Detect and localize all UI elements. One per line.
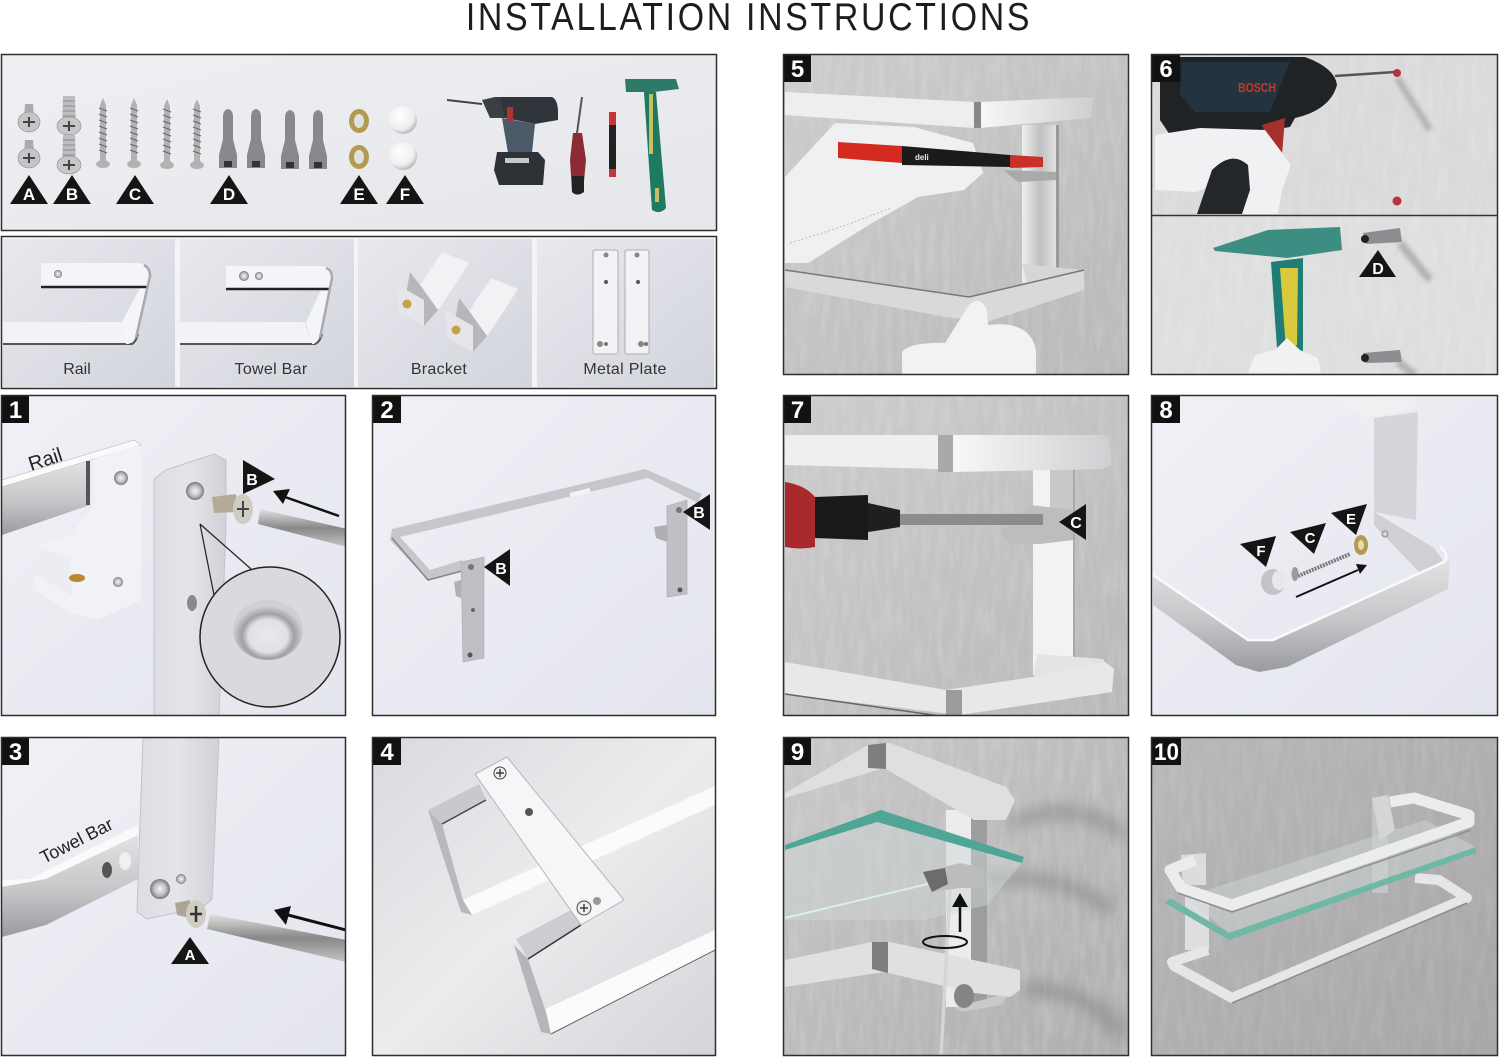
cast shadows — [985, 812, 1125, 1035]
screw C — [1292, 554, 1350, 581]
label triangle A — [171, 937, 209, 964]
arrow — [273, 489, 339, 516]
top rail — [785, 92, 1093, 128]
icon: hammer — [625, 79, 679, 212]
step number 1 — [2, 396, 29, 424]
step number 2: 2 — [380, 397, 394, 424]
gloved hand with marker — [785, 123, 983, 263]
upper rail — [1170, 798, 1471, 912]
lower rail loop — [514, 910, 717, 1034]
left plate — [454, 557, 484, 662]
label triangle B: B — [66, 185, 78, 204]
cap F — [1261, 569, 1286, 595]
lower gloved fingers — [902, 301, 1036, 375]
panel: step 2 — [372, 395, 716, 716]
label triangle E: E — [353, 185, 365, 204]
arrow — [274, 906, 346, 930]
label triangle C — [116, 175, 154, 204]
panel: step 10 — [1151, 737, 1498, 1056]
screwdriver — [207, 914, 346, 962]
label triangle A — [10, 175, 48, 204]
step number 5: 5 — [791, 56, 804, 83]
icon: screws B — [57, 96, 81, 174]
tile: metal plate: Metal Plate — [583, 361, 667, 378]
label triangle F: F — [400, 185, 410, 204]
screwdriver shaft — [941, 890, 950, 1056]
bracket under rail — [1003, 170, 1056, 182]
back white bar — [463, 785, 717, 915]
step number 6: 6 — [1159, 56, 1173, 83]
icon: screwdriver — [570, 97, 586, 194]
screwdriver — [785, 482, 1043, 548]
step number 6 — [1152, 55, 1180, 83]
icon: wall plugs D — [219, 109, 327, 169]
label triangle B — [243, 460, 275, 494]
label: Rail: Rail — [26, 444, 65, 476]
metal plate — [475, 757, 624, 925]
vertical plate — [946, 810, 987, 1007]
tile: metal plate — [537, 239, 714, 387]
tile: towel bar — [180, 239, 354, 387]
vertical plate — [1033, 470, 1075, 675]
label triangle B right — [683, 494, 710, 530]
step number 7 — [784, 396, 811, 424]
label triangle D: D — [223, 185, 235, 204]
label triangle B left — [484, 549, 510, 586]
step number 8: 8 — [1159, 397, 1173, 424]
step number 9: 9 — [791, 739, 804, 766]
icon: cordless drill — [447, 97, 558, 185]
vertical plate — [1333, 396, 1418, 520]
label triangle C: C — [1305, 530, 1316, 547]
label triangle B — [53, 175, 91, 204]
wall plugs — [1361, 228, 1402, 363]
label triangle E — [340, 175, 378, 204]
upper rail — [785, 743, 1015, 820]
label triangle C — [1290, 523, 1326, 554]
step number 5 — [784, 55, 811, 83]
label triangle A: A — [185, 947, 196, 964]
step number 4 — [373, 738, 401, 766]
wall with drill — [1151, 54, 1498, 215]
ring E — [1354, 535, 1368, 555]
bracket plate — [69, 446, 138, 587]
icon: long screws C — [96, 98, 204, 169]
panel: step 8 — [1151, 395, 1498, 716]
icon: brass rings E — [349, 109, 369, 169]
label triangle D: D — [1372, 261, 1384, 278]
callout: magnified hole — [200, 524, 340, 707]
label triangle D — [210, 175, 248, 204]
tile: towel bar: Towel Bar — [235, 361, 308, 378]
glass shelf — [1165, 820, 1476, 940]
screwdriver — [258, 509, 347, 547]
bottom bar — [785, 264, 1084, 322]
marker pen: deli — [915, 153, 929, 162]
label triangle C: C — [129, 185, 141, 204]
towel bar end — [2, 825, 138, 937]
bottom rail — [785, 942, 1020, 1012]
label triangle F — [1240, 536, 1276, 567]
label triangle E — [1331, 504, 1367, 535]
assembled rail frame — [390, 469, 702, 580]
step number 2 — [373, 396, 401, 424]
label triangle B left: B — [495, 561, 507, 578]
step number 9 — [784, 738, 811, 766]
wall with drill: BOSCH — [1238, 80, 1276, 95]
arrow with rotation mark — [923, 893, 968, 948]
panel: step 9 — [783, 737, 1129, 1056]
tile: rail — [3, 239, 175, 387]
tile: rail: Rail — [63, 361, 91, 378]
step number 4: 4 — [380, 739, 394, 766]
step number 3 — [2, 738, 29, 766]
rail end — [2, 440, 141, 535]
clamp bracket — [923, 863, 983, 892]
label triangle A: A — [23, 185, 35, 204]
label triangle F — [386, 175, 424, 204]
panel: parts and tools — [2, 54, 716, 230]
icon: screws A — [18, 104, 40, 168]
label triangle C: C — [1070, 515, 1082, 532]
screw B — [212, 494, 253, 524]
label triangle F: F — [1256, 543, 1266, 560]
metal plate — [137, 738, 219, 919]
label triangle E: E — [1346, 511, 1356, 528]
label triangle B: B — [246, 472, 258, 489]
panel: step 4 — [372, 737, 717, 1056]
back posts — [1181, 795, 1395, 950]
label: Towel Bar: Towel Bar — [37, 814, 116, 868]
label triangle D — [1359, 250, 1396, 278]
label triangle B right: B — [693, 505, 705, 522]
top shelf rail — [785, 435, 1112, 472]
step number 10: 10 — [1154, 739, 1179, 766]
right plate — [654, 500, 687, 597]
tile: bracket: Bracket — [411, 361, 467, 378]
marker pen — [838, 142, 1043, 168]
rail front face — [1153, 546, 1450, 672]
arrow — [1296, 564, 1367, 597]
step number 1: 1 — [9, 397, 22, 424]
vertical plate — [1022, 125, 1059, 283]
glass shelf — [785, 810, 1024, 920]
icon: marker pen — [609, 112, 616, 177]
panel: step 3 — [1, 737, 346, 1056]
panel: step 1 — [1, 395, 347, 716]
step number 7: 7 — [791, 397, 804, 424]
upper rail loop — [428, 784, 486, 915]
rail side inner band — [1374, 512, 1444, 573]
panel: step 6 — [1151, 54, 1498, 375]
label triangle C — [1059, 504, 1086, 540]
bottom rail — [785, 654, 1114, 716]
hole — [1382, 530, 1388, 538]
wall with hammer — [1151, 216, 1498, 375]
panel: components — [2, 236, 716, 388]
metal plate — [154, 454, 226, 716]
step number 8 — [1152, 396, 1180, 424]
step number 3: 3 — [9, 739, 22, 766]
tile: bracket — [358, 239, 532, 387]
bracket — [999, 505, 1073, 544]
panel: step 5 — [783, 54, 1129, 375]
lower rail — [1172, 878, 1467, 1003]
icon: caps F — [389, 106, 417, 170]
screw A — [175, 900, 206, 928]
panel: step 7 — [783, 395, 1129, 716]
